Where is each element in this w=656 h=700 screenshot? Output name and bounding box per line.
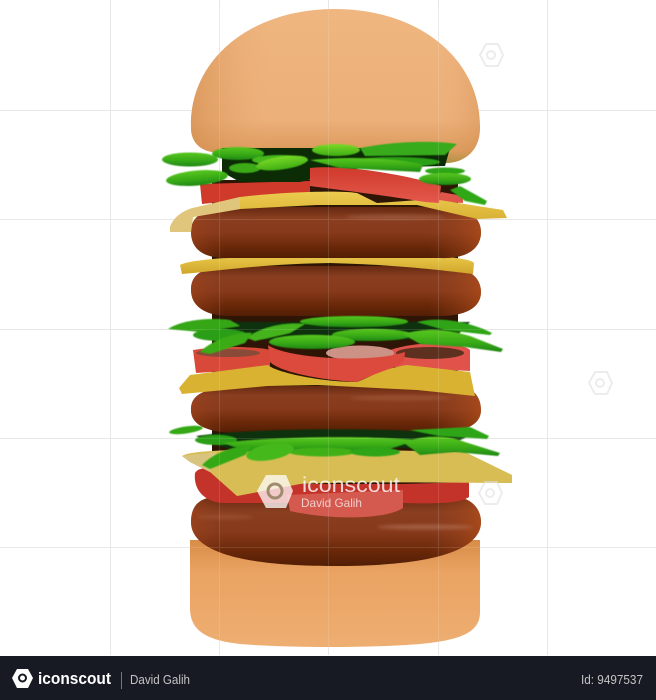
top bun <box>191 9 480 163</box>
cheese layer 2 <box>180 254 474 274</box>
tomato layer 3 <box>195 469 469 517</box>
cheese layer 1 <box>170 192 507 232</box>
lettuce layer 1 <box>162 142 487 205</box>
patty 4 <box>191 497 481 566</box>
watermark: iconscout David Galih: iconscout <box>302 474 400 497</box>
dark burger core <box>212 180 458 525</box>
watermark icon top <box>480 44 503 66</box>
patty 2 <box>191 266 481 316</box>
watermark icon middle <box>589 372 612 394</box>
lettuce layer 3 <box>169 424 500 469</box>
cheese layer 4 <box>182 449 512 496</box>
lettuce layer 2 <box>168 316 503 354</box>
footer logo icon <box>12 669 33 688</box>
tomato layer 1 <box>200 181 463 204</box>
cheese layer 3 <box>179 365 475 396</box>
grid showing through burger <box>191 10 481 650</box>
patty 1 <box>191 207 481 258</box>
watermark: iconscout David Galih <box>257 474 400 510</box>
footer brand: iconscout <box>38 670 111 688</box>
watermark: iconscout David Galih: David Galih <box>301 496 362 510</box>
watermark icon lower <box>479 482 502 504</box>
footer id: Id: 9497537 <box>581 672 643 687</box>
footer author: David Galih <box>130 672 190 687</box>
patty 3 <box>191 385 481 433</box>
lettuce shadow 1 <box>222 148 450 182</box>
tomato slice 1 front <box>310 167 441 203</box>
tomato layer 2 <box>193 343 470 382</box>
footer bar <box>0 656 656 700</box>
bottom bun <box>190 540 480 647</box>
